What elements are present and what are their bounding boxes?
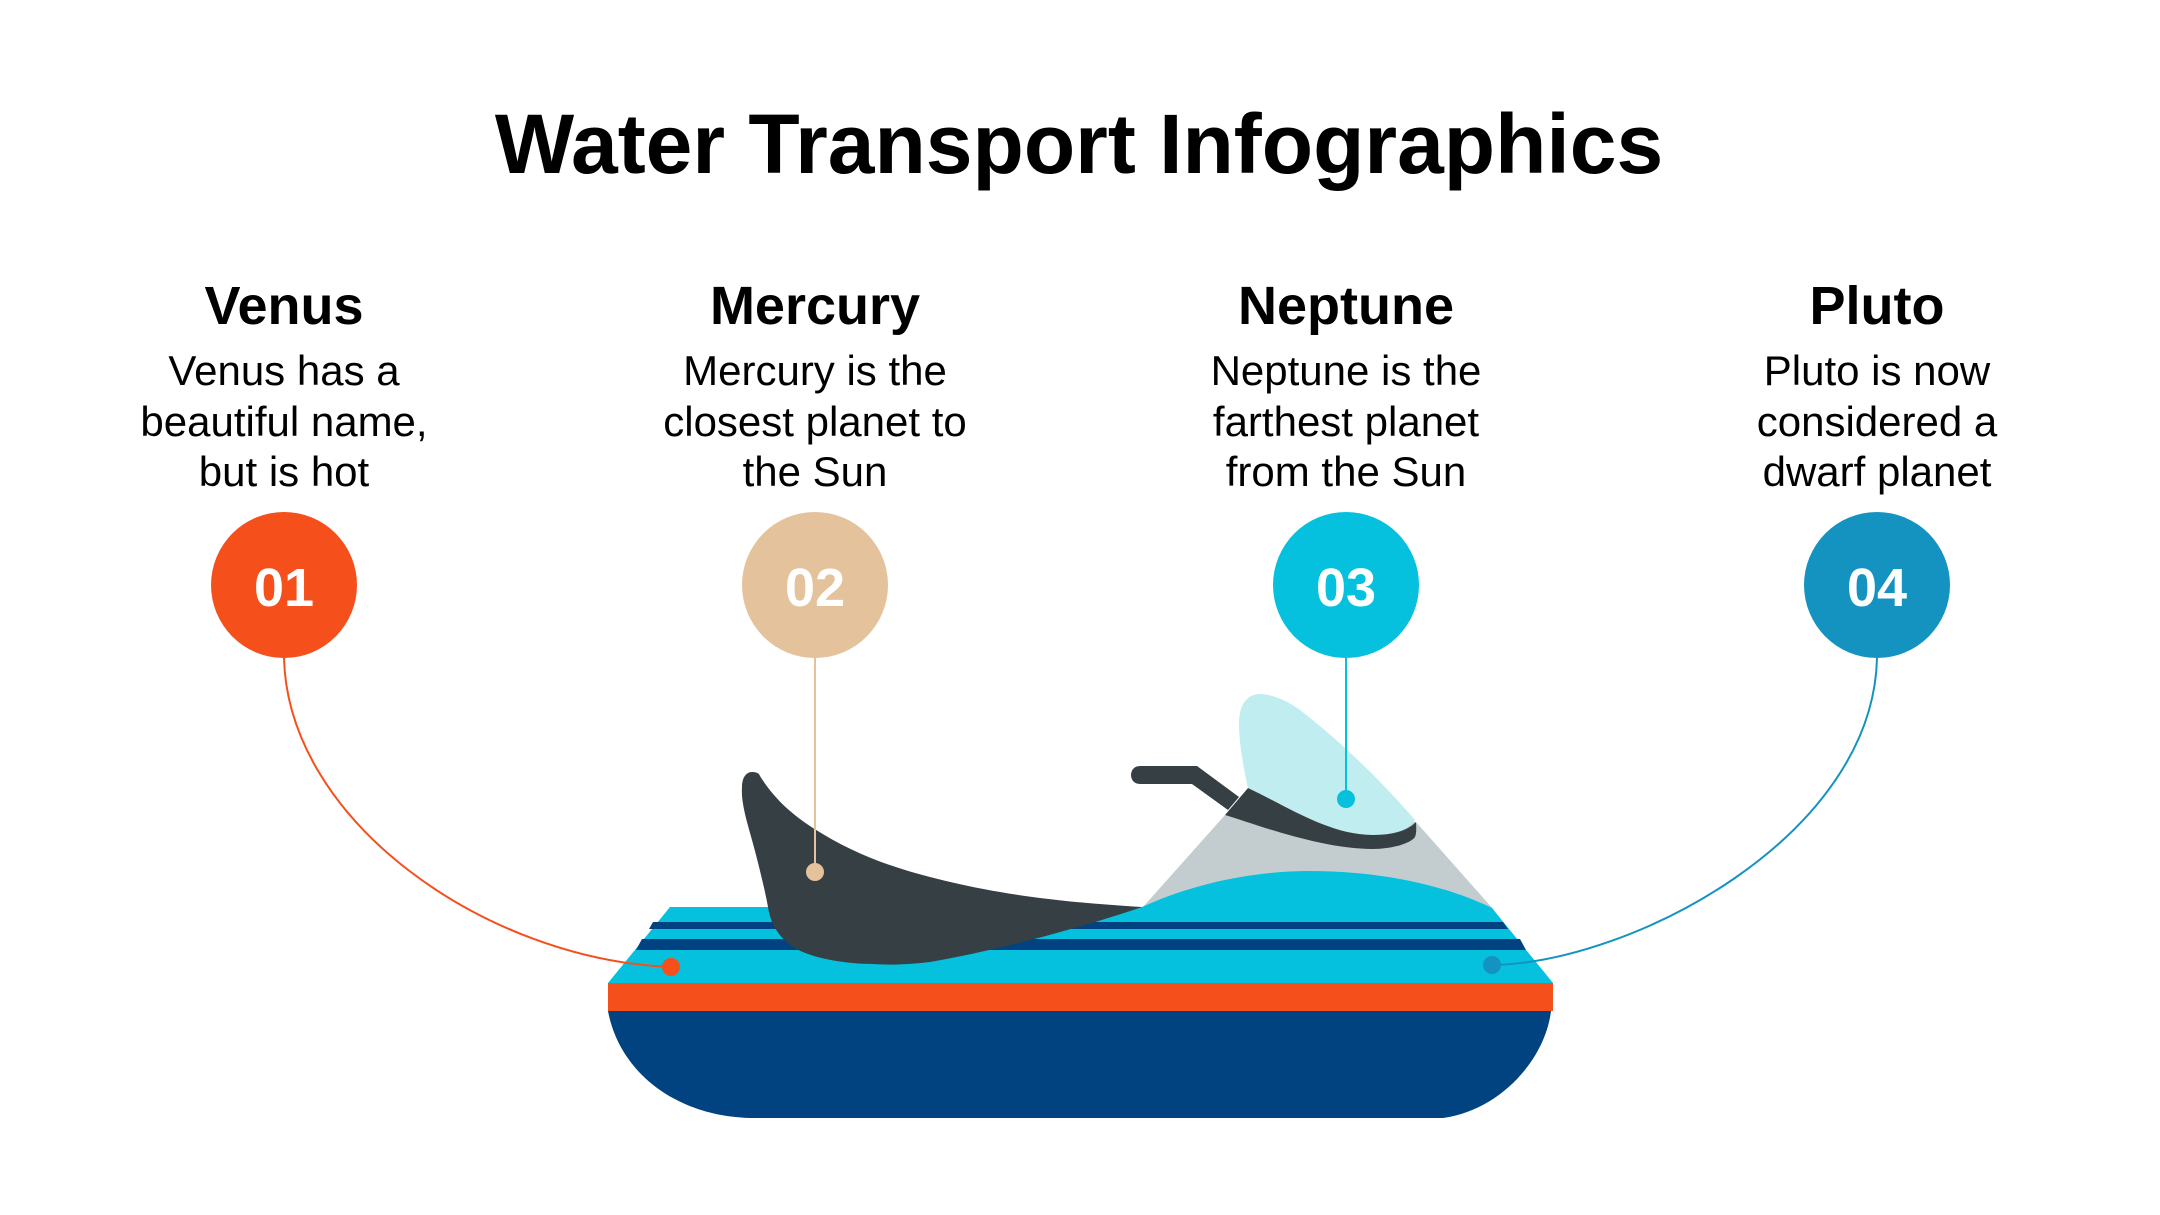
heading: Mercury <box>710 276 920 336</box>
connector line <box>284 658 671 967</box>
title: Water Transport Infographics <box>495 97 1663 191</box>
connector dot <box>662 958 680 976</box>
heading: Venus <box>204 276 364 336</box>
number badge <box>1804 512 1950 658</box>
text block: dwarf planet <box>1763 448 1992 495</box>
callout: Neptune <box>1211 276 1481 808</box>
connector line <box>814 658 816 872</box>
text block: the Sun <box>743 448 887 495</box>
orange stripe <box>608 983 1553 1011</box>
text block: closest planet to <box>663 398 967 445</box>
number badge: 02 <box>785 558 845 618</box>
number badge <box>211 512 357 658</box>
text block: Pluto is now <box>1764 347 1991 394</box>
callout: Pluto <box>1483 276 1998 974</box>
heading: Neptune <box>1238 276 1454 336</box>
panel: jet ski illustration <box>608 694 1553 1118</box>
windshield <box>1239 694 1415 835</box>
text block: Neptune is the <box>1211 347 1481 394</box>
text block: farthest planet <box>1213 398 1479 445</box>
hull <box>608 1011 1551 1118</box>
number badge: 03 <box>1316 558 1376 618</box>
text block: Mercury is the <box>683 347 947 394</box>
heading: Pluto <box>1810 276 1944 336</box>
seat <box>742 772 1142 965</box>
text block: but is hot <box>199 448 370 495</box>
number badge <box>742 512 888 658</box>
connector dot <box>1337 790 1355 808</box>
deck stripes <box>636 922 1526 950</box>
text block <box>1211 347 1481 495</box>
text block <box>1757 347 1998 495</box>
text block: considered a <box>1757 398 1998 445</box>
connector line <box>1345 658 1347 799</box>
text block <box>140 347 428 495</box>
number badge <box>1273 512 1419 658</box>
windshield support cone <box>1143 815 1494 910</box>
number badge: 01 <box>254 558 314 618</box>
deck <box>608 871 1553 983</box>
connector dot <box>1483 956 1501 974</box>
text block <box>663 347 967 495</box>
text block: from the Sun <box>1226 448 1466 495</box>
callout: Mercury <box>663 276 967 881</box>
text block: beautiful name, <box>140 398 428 445</box>
callout: Venus <box>140 276 680 976</box>
text block: Venus has a <box>168 347 400 394</box>
connector line <box>1492 658 1877 965</box>
number badge: 04 <box>1847 558 1907 618</box>
windshield trim <box>1225 788 1416 849</box>
connector dot <box>806 863 824 881</box>
handlebar <box>1131 766 1239 810</box>
